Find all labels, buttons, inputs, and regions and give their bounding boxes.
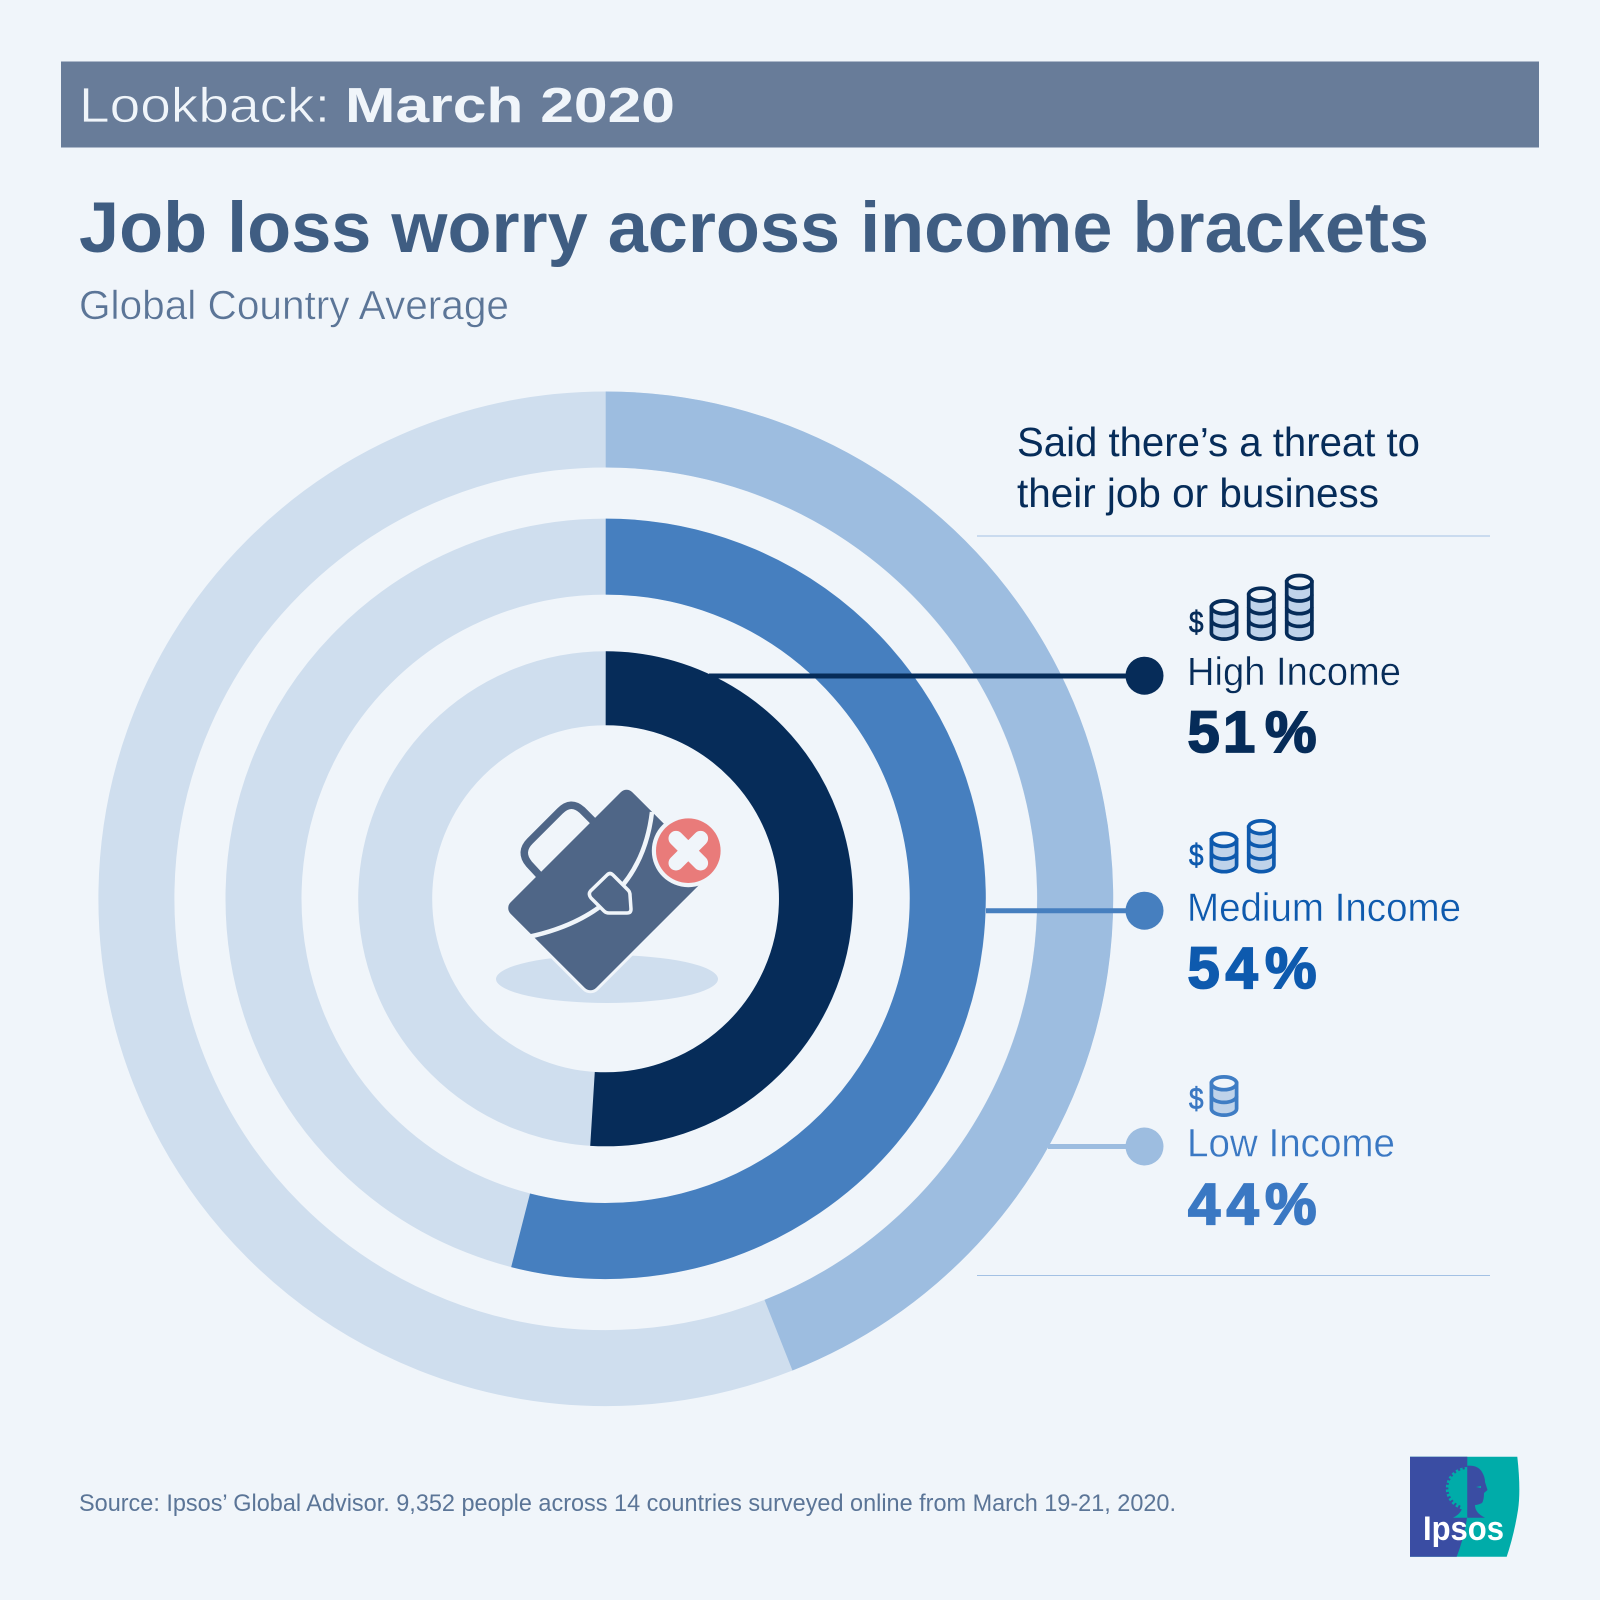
- icon: two coin stacks: $: [1189, 837, 1204, 872]
- icon: one coin stack: $: [1189, 1081, 1204, 1116]
- header banner: [61, 62, 1539, 148]
- legend heading: [1017, 419, 1420, 516]
- logo tree and face: [1448, 1466, 1488, 1518]
- header banner: Lookback:: [79, 79, 330, 133]
- value: 44%: 44%: [1188, 1172, 1317, 1237]
- legend rules: [977, 536, 1490, 1276]
- icon: two coin stacks: [1189, 821, 1274, 872]
- legend heading: their job or business: [1017, 470, 1379, 516]
- red badge: [652, 814, 725, 887]
- label: high income: High Income: [1187, 650, 1401, 694]
- briefcase body: [505, 786, 712, 994]
- connector: high income: [709, 657, 1164, 695]
- ring: medium income 54%: [264, 557, 948, 1241]
- ring: high income 51%: [395, 688, 816, 1109]
- header banner: March 2020: [345, 79, 675, 133]
- legend heading: Said there’s a threat to: [1017, 419, 1420, 465]
- ring: low income 44%: [136, 429, 1075, 1368]
- icon: three coin stacks: [1189, 576, 1312, 640]
- icon: briefcase with red cross: [496, 786, 725, 1003]
- title: Job loss worry across income brackets: [79, 189, 1429, 268]
- connector: low income: [1048, 1128, 1164, 1166]
- donut chart: concentric income rings: [136, 429, 1075, 1368]
- icon: three coin stacks: $: [1189, 605, 1204, 640]
- value: 51%: 51%: [1188, 700, 1317, 765]
- briefcase shadow: [496, 955, 718, 1003]
- briefcase flap line: [528, 812, 652, 937]
- logo: Ipsos: Ipsos: [1423, 1510, 1504, 1548]
- label: medium income: Medium Income: [1187, 886, 1461, 930]
- legend item: high income: [1187, 576, 1401, 765]
- label: low income: Low Income: [1187, 1122, 1395, 1166]
- legend item: medium income: [1187, 821, 1461, 1001]
- icon: one coin stack: [1189, 1077, 1237, 1116]
- source note: Source: Ipsos’ Global Advisor. 9,352 people across 14 countries surveyed online from March 19-21, 2020.: [79, 1490, 1176, 1517]
- logo: Ipsos: [1410, 1457, 1519, 1557]
- connector: medium income: [986, 892, 1164, 930]
- cross mark: [676, 838, 701, 863]
- value: 54%: 54%: [1188, 936, 1317, 1001]
- briefcase clasp: [589, 874, 631, 913]
- subtitle: Global Country Average: [79, 282, 509, 328]
- legend item: low income: [1187, 1077, 1395, 1237]
- briefcase handle: [524, 805, 593, 877]
